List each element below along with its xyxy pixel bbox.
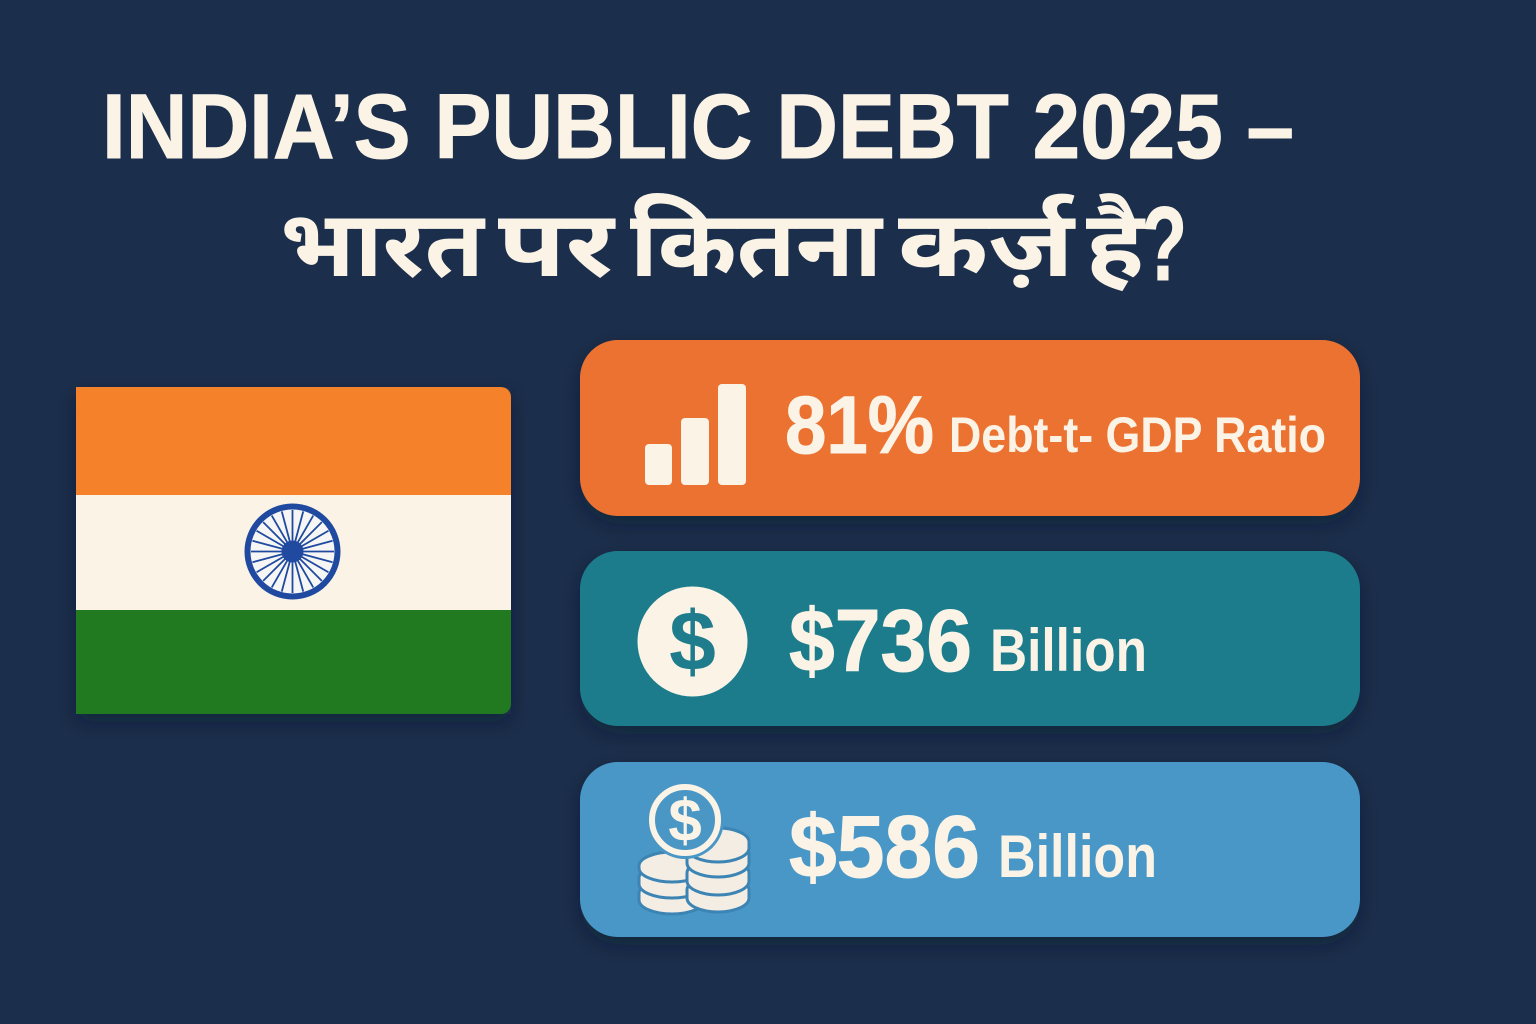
icon: dollar circle: [638, 586, 748, 696]
stat: $586: $586: [789, 797, 980, 896]
stat: 81%: 81%: [785, 380, 934, 471]
title line: Hindi: पर: [498, 194, 616, 296]
panel: $586 billion card: [580, 762, 1360, 937]
title line: English: INDIA’S PUBLIC DEBT 2025 –: [102, 76, 1294, 178]
label: Billion: Billion: [990, 617, 1147, 684]
icon: bar chart: [645, 384, 746, 485]
title: [102, 76, 1294, 303]
title line: Hindi: ?: [1142, 186, 1187, 303]
flag white band: [76, 495, 511, 610]
icon: coin stack: $: [668, 787, 702, 854]
title line: Hindi: है: [1086, 194, 1146, 296]
icon: Ashoka Chakra: [248, 506, 338, 596]
icon: dollar circle: $: [669, 594, 716, 688]
label: Billion: Billion: [998, 823, 1157, 890]
title line: Hindi: कर्ज़: [898, 193, 1076, 296]
label: Debt-to-GDP ratio: Debt-t- GDP Ratio: [949, 407, 1326, 463]
panel: Indian flag: [76, 387, 511, 714]
title line: Hindi: कितना: [630, 194, 884, 296]
title line: Hindi: [280, 186, 1187, 303]
icon: coin stack: [639, 781, 749, 914]
flag saffron band: [76, 387, 511, 495]
title line: Hindi: भारत: [280, 194, 486, 296]
stat: $736: $736: [789, 591, 972, 690]
flag green band: [76, 610, 511, 714]
panel: $736 billion card: [580, 551, 1360, 726]
panel: debt-to-GDP card: [580, 340, 1360, 516]
